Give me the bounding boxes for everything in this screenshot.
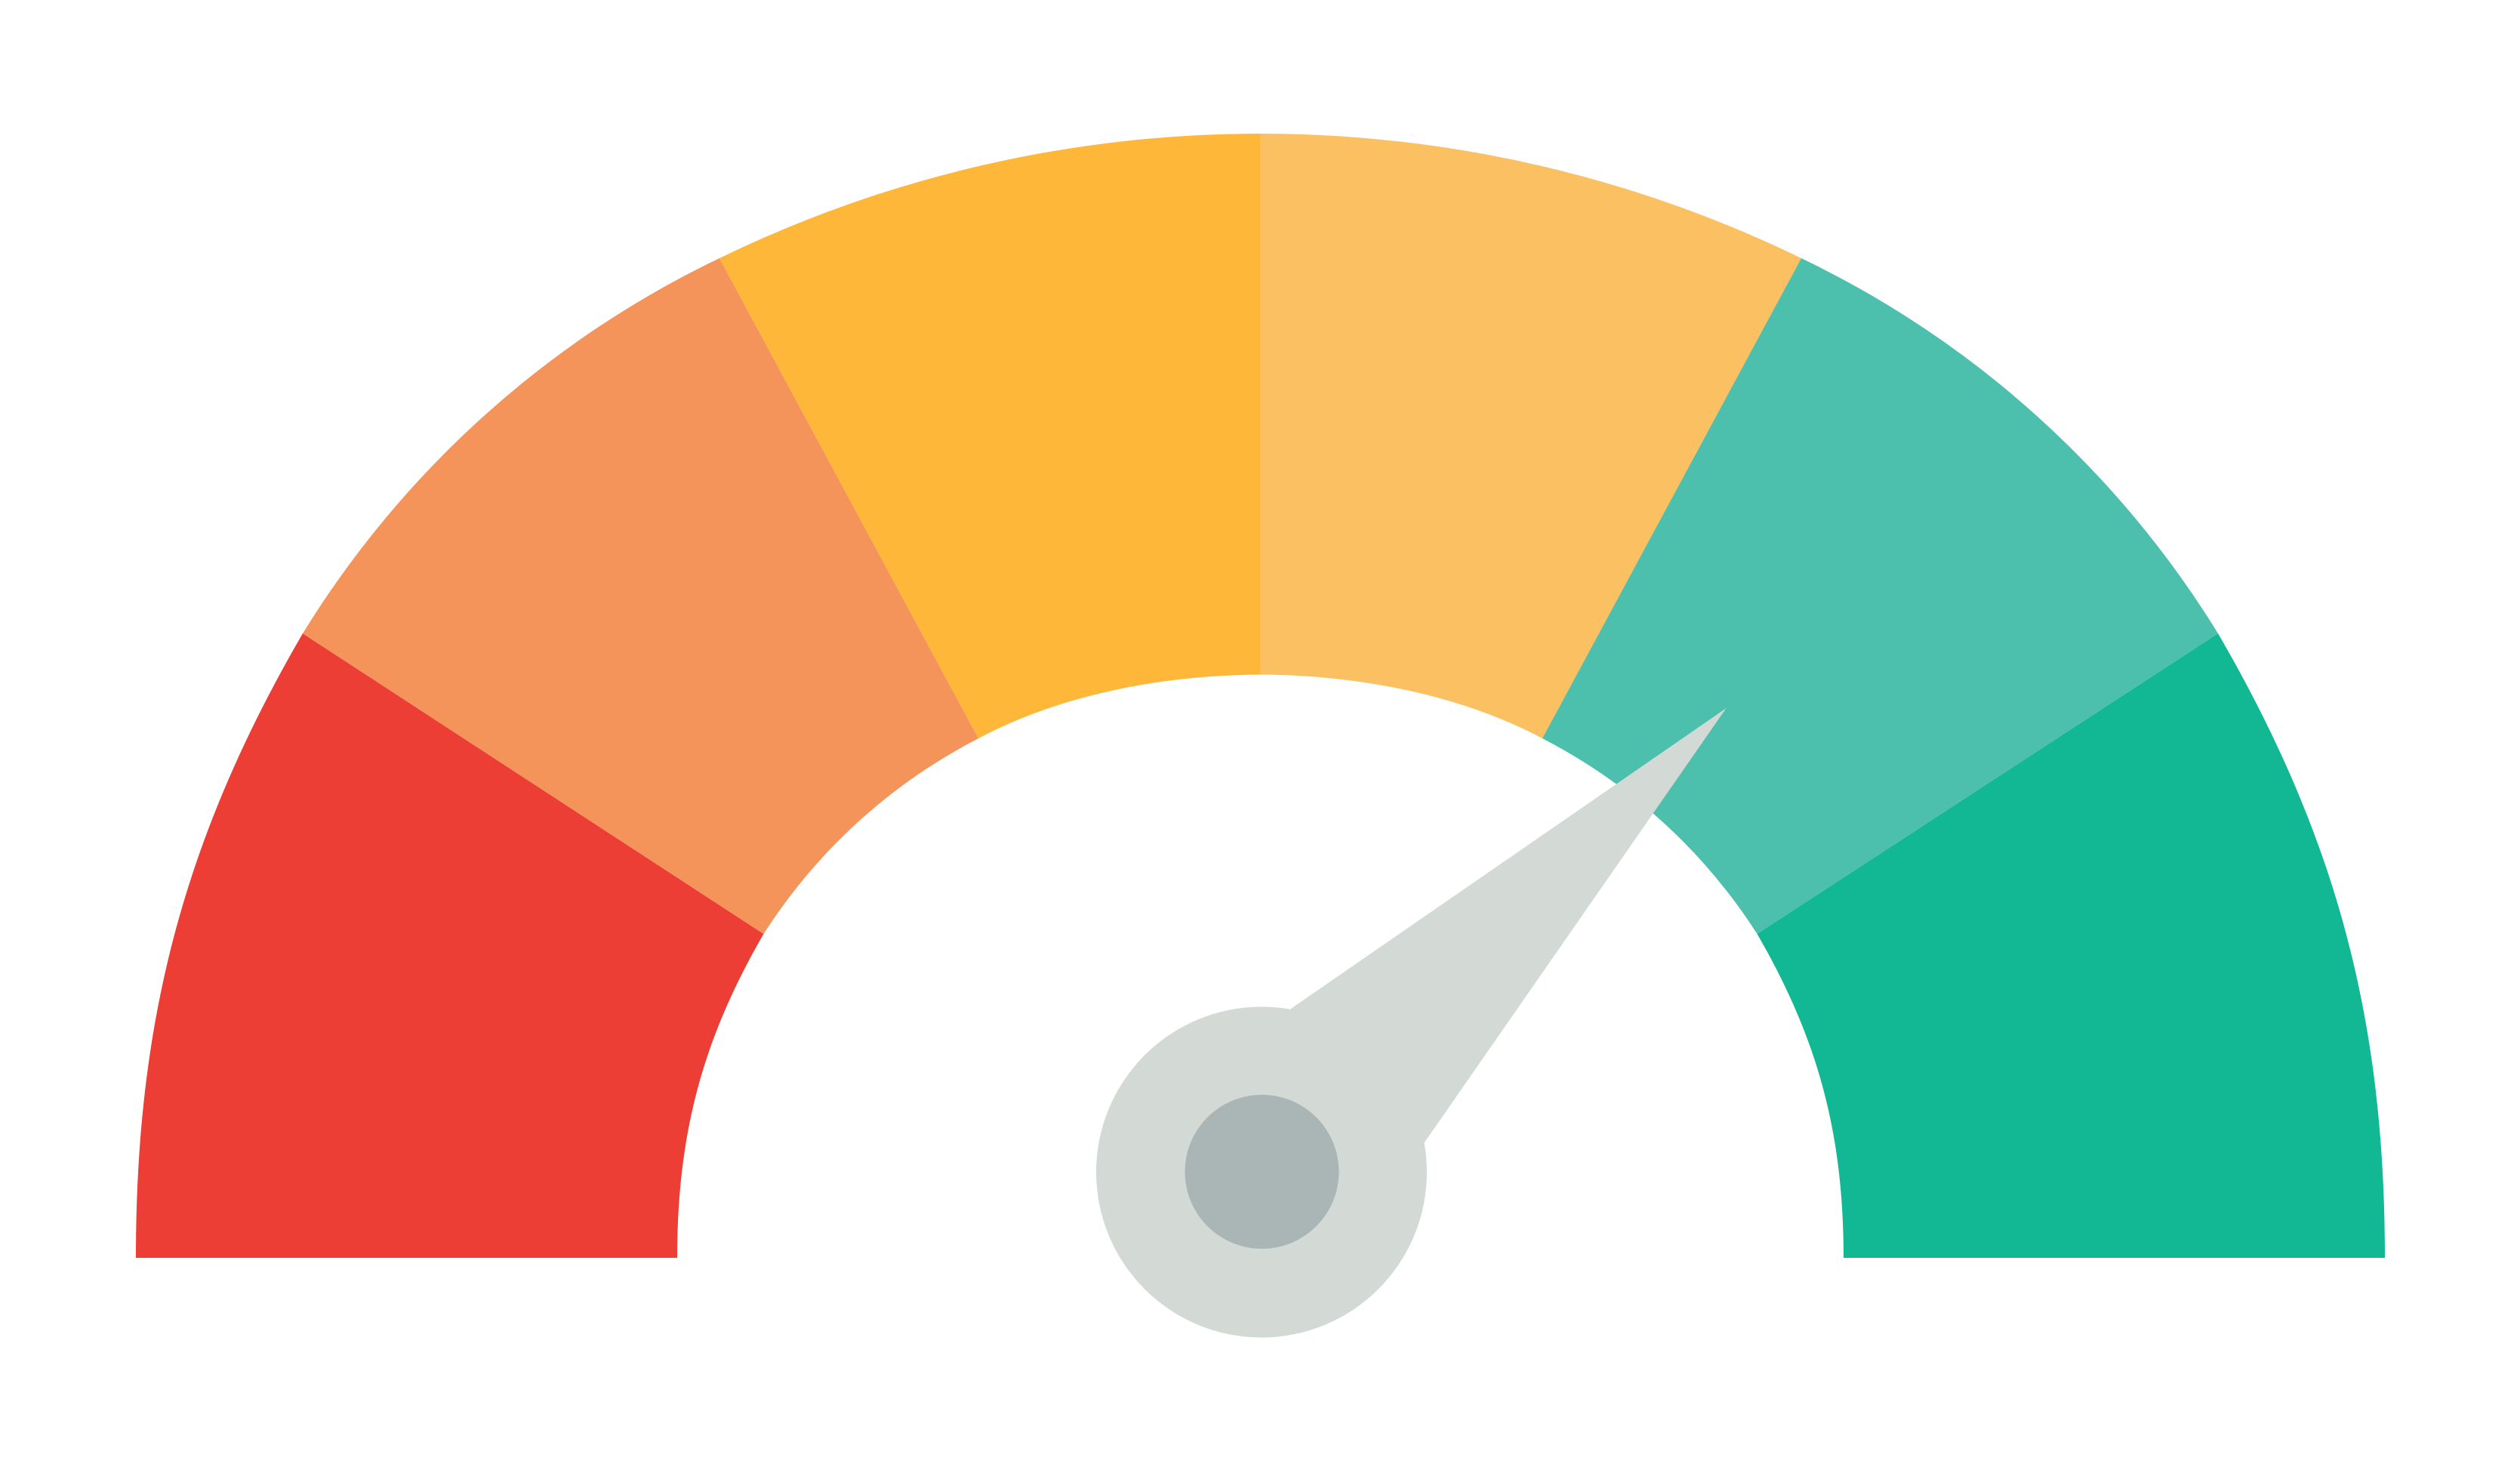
segment: light amber [1261,134,1801,738]
segment: teal [1542,258,2218,934]
segment: green [1758,633,2385,1258]
segment: red [136,633,764,1258]
hub centre [1185,1095,1339,1249]
gauge needle [1096,708,1726,1338]
gauge dial [136,134,2385,1258]
segment: orange [303,258,978,934]
needle hub [1096,1007,1427,1338]
needle pointer [1262,708,1726,1172]
segment: amber [719,134,1261,738]
